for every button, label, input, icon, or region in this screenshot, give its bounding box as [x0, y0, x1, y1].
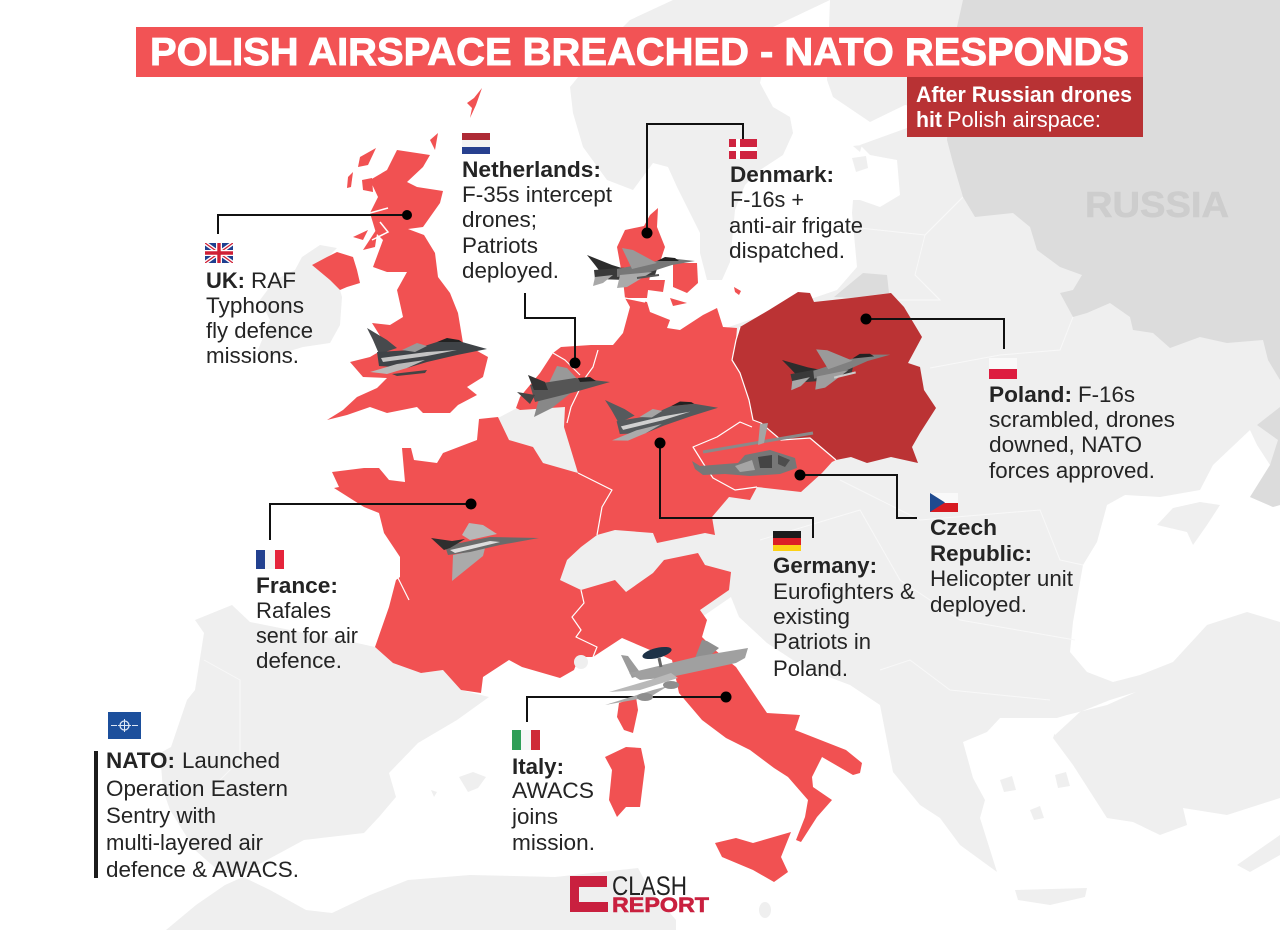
logo: Clash Report [570, 871, 709, 917]
callout: UK: RAF [251, 268, 296, 293]
icon: Poland flag [989, 358, 1017, 379]
title banner: POLISH AIRSPACE BREACHED - NATO RESPONDS [150, 31, 1129, 74]
callout: Czech Republic: Czech [930, 515, 997, 540]
callout: Czech Republic: Helicopter unit [930, 566, 1073, 591]
callout: Germany: existing [773, 604, 850, 629]
callout: NATO: Sentry with [106, 803, 216, 828]
callout: Denmark: dispatched. [729, 238, 845, 263]
callout: Denmark: Denmark: [730, 162, 834, 187]
callout: Italy: AWACS [512, 778, 594, 803]
icon: AWACS over Italy [605, 640, 748, 705]
callout: NATO: NATO: [106, 748, 175, 773]
callout: NATO: multi-layered air [106, 830, 263, 855]
icon: Italy flag [512, 730, 540, 750]
icon: F-16 over Poland [781, 342, 893, 393]
Poland [732, 292, 936, 463]
icon: NATO flag [108, 712, 141, 739]
callout: Germany: Eurofighters & [773, 579, 915, 604]
callout: Poland: forces approved. [989, 458, 1155, 483]
callout: Germany: Poland. [773, 656, 848, 681]
icon: F-16 over Denmark [587, 248, 695, 288]
icon: Rafale over France [431, 523, 539, 581]
icon: Denmark flag [729, 139, 757, 159]
callout: Germany: Patriots in [773, 629, 871, 654]
callout: UK: fly defence [206, 318, 313, 343]
callout: Poland: Poland: [989, 382, 1072, 407]
Russia territory [834, 0, 1280, 507]
map label: Russia: RUSSIA [1085, 184, 1229, 225]
callout: UK: UK: [206, 268, 245, 293]
subtitle box: After Russian drones [916, 82, 1132, 107]
icon: Typhoon over UK [367, 328, 487, 376]
Germany, Netherlands, Czech Republic [516, 298, 836, 543]
callout: Italy: joins [511, 804, 558, 829]
subtitle box [907, 77, 1143, 137]
callout: Denmark: anti-air frigate [729, 213, 863, 238]
callout: NATO: defence & AWACS. [106, 857, 299, 882]
icon: France flag [256, 550, 284, 569]
callout: NATO: Launched [182, 748, 280, 773]
callout: NATO [94, 712, 299, 882]
callout: Netherlands: Patriots [462, 233, 538, 258]
leader lines and dots [218, 124, 1004, 722]
UK [312, 88, 488, 420]
country borders [398, 298, 836, 669]
callout: France: sent for air [256, 623, 358, 648]
callout: Netherlands [462, 133, 612, 283]
callout: NATO: Operation Eastern [106, 776, 288, 801]
icon: Eurofighter over Germany [605, 388, 720, 443]
callout: France: Rafales [256, 598, 331, 623]
callout: Poland: scrambled, drones [989, 407, 1175, 432]
callout: Germany: Germany: [773, 553, 877, 578]
icon: Netherlands flag [462, 133, 490, 154]
logo: Clash Report: CLASH [612, 871, 687, 901]
callout: Netherlands: Netherlands: [462, 157, 601, 182]
callout: Czech Republic: Republic: [930, 541, 1032, 566]
callout: UK: missions. [206, 343, 299, 368]
callout: Italy: Italy: [512, 754, 564, 779]
callout: Netherlands: drones; [462, 207, 537, 232]
icon: Germany flag [773, 531, 801, 551]
icon: Czech flag [930, 493, 958, 512]
subtitle box: hit [916, 107, 943, 132]
callout: Netherlands: F-35s intercept [462, 182, 612, 207]
Italy [572, 553, 862, 882]
callout: Poland: F-16s [1078, 382, 1135, 407]
callout: France: defence. [256, 648, 342, 673]
callout: Italy: mission. [512, 830, 595, 855]
callout: Poland [989, 358, 1175, 483]
callout: France [256, 550, 358, 673]
icon: UK flag [205, 243, 233, 263]
France [332, 417, 612, 693]
highlighted NATO countries [312, 88, 862, 882]
callout: France: France: [256, 573, 338, 598]
callout: Denmark: F-16s + [730, 187, 804, 212]
logo: Clash Report: REPORT [612, 894, 709, 917]
callout: Czech Republic [930, 493, 1073, 617]
icon: F-35 over Netherlands [517, 366, 610, 417]
callout: Italy [511, 730, 595, 855]
callout: UK: Typhoons [206, 293, 304, 318]
icon: helicopter over Czech Republic [692, 423, 813, 476]
callout: Czech Republic: deployed. [930, 592, 1027, 617]
subtitle box: Polish airspace: [947, 107, 1101, 132]
Denmark [617, 208, 741, 306]
callout: Poland: downed, NATO [989, 432, 1142, 457]
callout: UK [205, 243, 313, 368]
callout: Denmark [729, 139, 863, 263]
callout: Netherlands: deployed. [462, 258, 559, 283]
callout: Germany [773, 531, 915, 681]
